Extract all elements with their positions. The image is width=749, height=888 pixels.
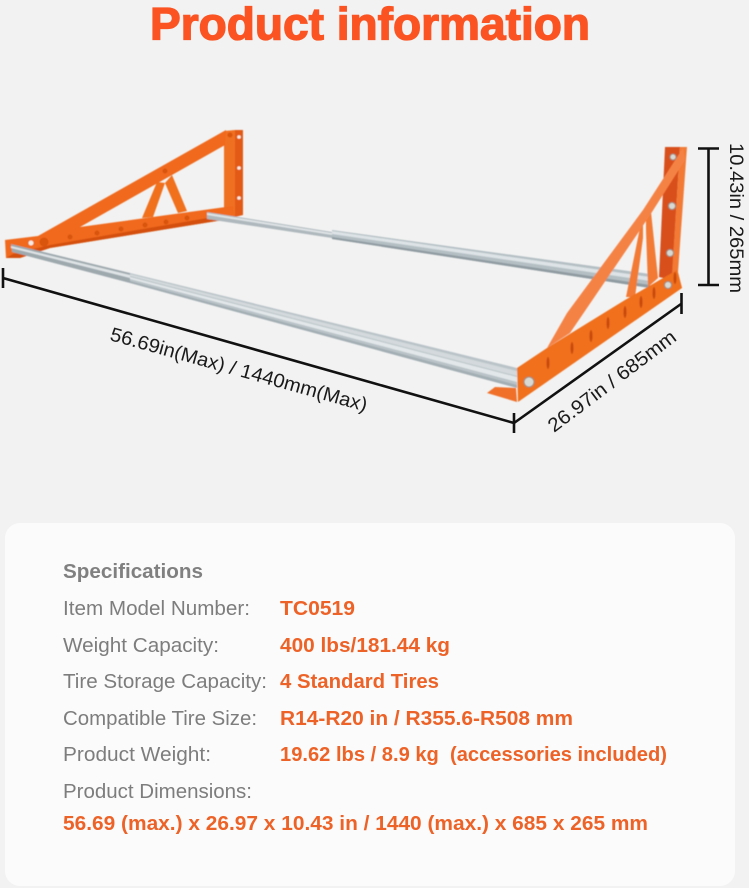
spec row: product dimensions value: 56.69 (max.) x 26.97 x 10.43 in / 1440 (max.) x 685 x 265 mm xyxy=(63,813,648,835)
dimension: height 10.43in: 10.43in / 265mm xyxy=(725,143,747,293)
title: Product information xyxy=(150,0,590,50)
spec row: model number: Item Model Number: xyxy=(63,598,250,620)
spec row: product dimensions label: Product Dimensions: xyxy=(63,781,252,803)
spec row: product weight: 19.62 lbs / 8.9 kg (accessories included) xyxy=(280,744,667,766)
spec row: model number: TC0519 xyxy=(280,598,355,620)
front rod xyxy=(11,244,517,388)
spec row: tire storage capacity: Tire Storage Capacity: xyxy=(63,671,267,693)
spec row: weight capacity: Weight Capacity: xyxy=(63,635,219,657)
spec row: compatible tire size: Compatible Tire Size: xyxy=(63,708,257,730)
spec row: weight capacity xyxy=(63,635,450,657)
spec row: model number xyxy=(63,598,355,620)
dimension: depth 26.97in xyxy=(514,293,682,437)
spec row: tire storage capacity: 4 Standard Tires xyxy=(280,671,439,693)
left wall bracket xyxy=(5,130,243,258)
panel: specifications xyxy=(5,523,735,886)
dimension: depth 26.97in: 26.97in / 685mm xyxy=(544,326,681,437)
dimension: height 10.43in xyxy=(698,143,747,293)
spec row: product weight xyxy=(63,744,667,766)
spec row: compatible tire size: R14-R20 in / R355.6-R508 mm xyxy=(280,708,573,730)
dimension: width 56.69in: 56.69in(Max) / 1440mm(Max) xyxy=(108,324,370,416)
spec row: product weight: Product Weight: xyxy=(63,744,211,766)
spec row: weight capacity: 400 lbs/181.44 kg xyxy=(280,635,450,657)
rear rod xyxy=(207,212,650,288)
heading: specifications: Specifications xyxy=(63,561,203,583)
spec row: tire storage capacity xyxy=(63,671,439,693)
right wall bracket xyxy=(487,147,687,402)
spec row: compatible tire size xyxy=(63,708,573,730)
dimension: width 56.69in xyxy=(3,268,514,433)
product illustration: tire rack xyxy=(5,130,687,402)
